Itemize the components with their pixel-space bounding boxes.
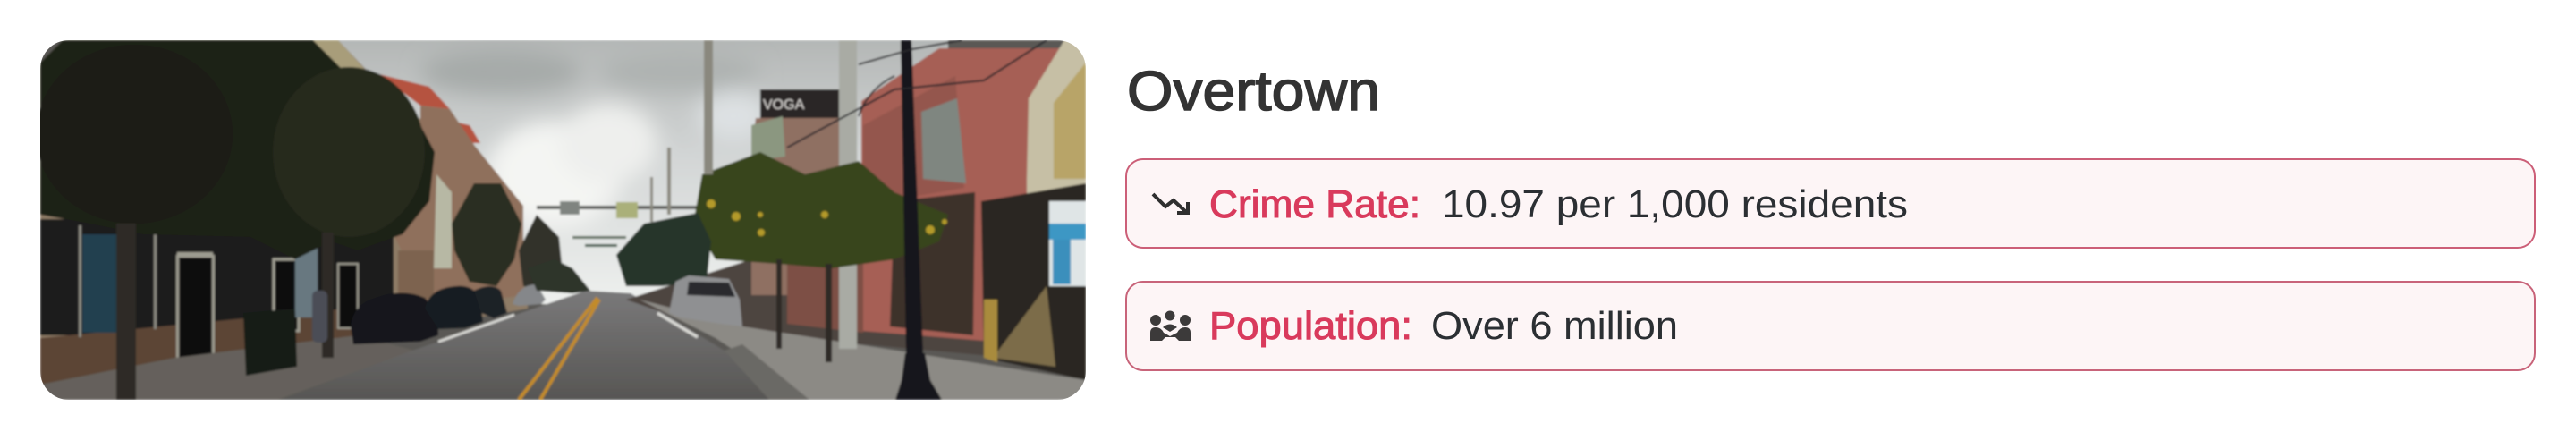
- far right pink buildings: [751, 40, 1086, 358]
- value: population: Over 6 million: [1431, 304, 1678, 348]
- black lamp post: [895, 40, 942, 400]
- billboard: VOGA: [763, 97, 805, 113]
- utility poles: [650, 40, 713, 222]
- road centre lines: [519, 298, 599, 400]
- right storefronts base: [626, 259, 1011, 358]
- left trees: [36, 40, 564, 400]
- left sidewalk: [40, 335, 415, 400]
- pedestrian: [312, 291, 327, 343]
- label: crime rate: Crime Rate:: [1209, 182, 1420, 226]
- overhead wires: [787, 40, 1046, 148]
- photo: Overtown street scene: [36, 40, 1086, 400]
- left building: [40, 40, 528, 398]
- green trees with yellow flowers: [616, 152, 948, 362]
- right sidewalk: [640, 300, 1086, 400]
- billboard: [760, 89, 839, 122]
- panel: crime rate: [1126, 159, 2535, 248]
- blue sign: [1049, 201, 1086, 286]
- panel: population: [1126, 282, 2535, 370]
- lane lines: [438, 313, 698, 342]
- trash bin: [243, 309, 297, 376]
- label: population: Population:: [1209, 304, 1412, 348]
- dark cars: [351, 284, 546, 344]
- icon: trending down arrow: [1153, 194, 1188, 213]
- concrete pole: [839, 40, 857, 349]
- value: crime rate: 10.97 per 1,000 residents: [1442, 182, 1908, 226]
- icon: group of people: [1150, 311, 1191, 341]
- silver car: [669, 275, 742, 326]
- traffic signal arm: [535, 200, 699, 249]
- road: [360, 290, 744, 377]
- sky: [304, 40, 948, 304]
- iron fence: [981, 183, 1086, 380]
- distant trees: [533, 262, 591, 295]
- title: Overtown: [1127, 61, 1380, 123]
